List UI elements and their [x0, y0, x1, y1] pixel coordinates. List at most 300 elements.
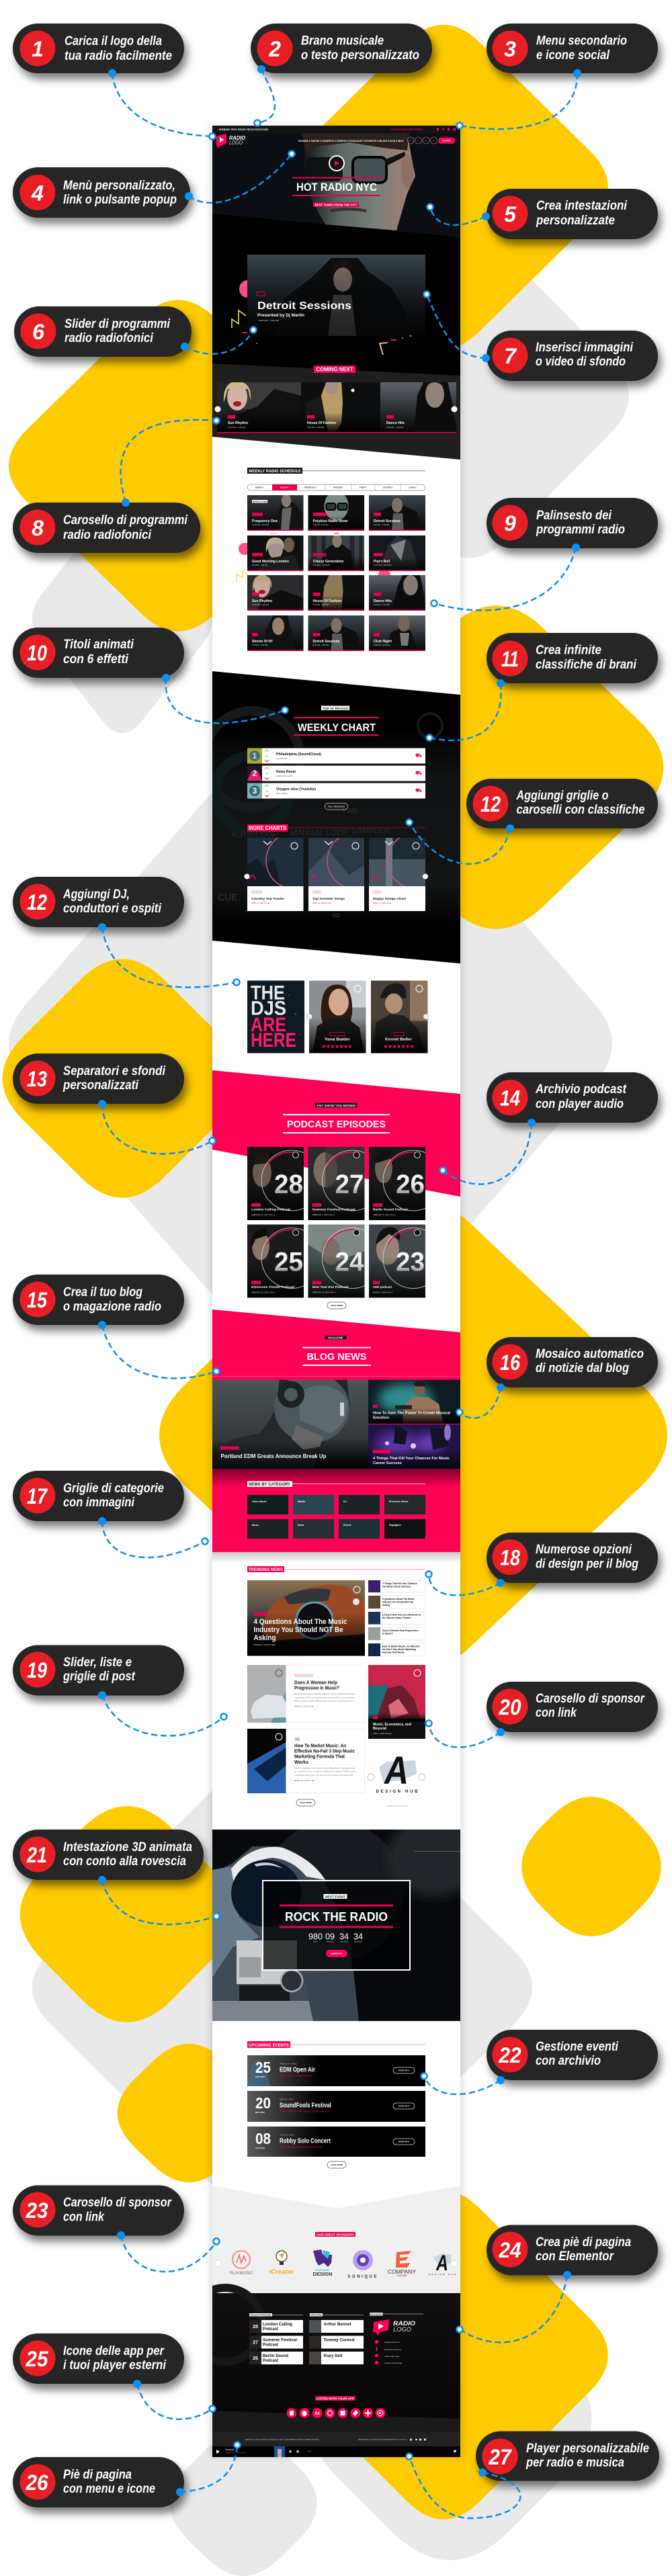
- callout 3: Menu secondario: [536, 34, 627, 48]
- footer column: podcast episodes: Podcast: [263, 2359, 278, 2363]
- callout 7: [487, 331, 658, 381]
- footer column: podcast episodes: [249, 2313, 303, 2364]
- section: podcast episodes: [212, 1070, 460, 1309]
- callout 26: Piè di pagina: [63, 2468, 132, 2482]
- website page mockup: [208, 124, 465, 2459]
- connector 7: [423, 292, 490, 362]
- callout 13: [13, 1054, 184, 1104]
- callout 27: Player personalizzabile: [526, 2442, 649, 2456]
- post card: Does A Woman Help: MARCH 21, 2020 ♥ 6 ◀: [294, 1705, 313, 1708]
- callout 8: 8: [32, 516, 44, 540]
- card: The DJs are here: ARE: [251, 1014, 286, 1036]
- chart row 2: Noise Room: [276, 770, 296, 774]
- podcast heading: [283, 1103, 390, 1133]
- footer column: contacts: [370, 2313, 423, 2364]
- podcast card 27: 27: [335, 1170, 364, 1199]
- card: Club Night: 9:30 PM - 12:00 AM: [374, 644, 390, 646]
- callout 26: con menu e icone: [63, 2482, 155, 2496]
- callout 19: Slider, liste e: [63, 1656, 132, 1670]
- connector 14: [439, 1119, 536, 1185]
- podcast card 28: FEBRUARY 21, 2020 ♥ 66 ▸ 9: [251, 1213, 275, 1216]
- callout 25: Icone delle app per: [63, 2344, 165, 2358]
- chart row 2: 2: [253, 769, 257, 778]
- mosaic post: Musical emotion: [368, 1380, 460, 1424]
- card: Detroit Sessions: Detroit Sessions: [374, 519, 401, 523]
- load more button: LOAD MORE: [331, 1304, 343, 1307]
- footer column: podcast episodes: 26: [253, 2356, 258, 2361]
- chart card: Country Top Tracks: [247, 838, 304, 911]
- card: Frequency One: NOW PLAYING: [253, 500, 267, 503]
- connector 3: [457, 69, 581, 129]
- callout 4: link o pulsante popup: [63, 193, 177, 207]
- event: EDM Open Air: MAR 2021: [255, 2075, 265, 2078]
- callout 2: [251, 24, 432, 73]
- footer column: podcast episodes: 28: [253, 2325, 258, 2329]
- event box: ROCK THE RADIO: [285, 1910, 388, 1924]
- podcast card 26: Berlin Sound Podcast: [373, 1208, 408, 1212]
- chart row 1: ⛟: [415, 753, 422, 759]
- podcast card 27: [308, 1147, 364, 1220]
- podcast card 26: 26: [396, 1170, 425, 1199]
- connector 12 charts: [406, 820, 514, 864]
- card: House Of Fashion: House Of Fashion: [313, 599, 341, 603]
- post list: Industry You Should NOT Be: [382, 1600, 413, 1603]
- callout 13: personalizzati: [62, 1078, 139, 1092]
- category grid: Events: [343, 1524, 351, 1527]
- event box: 980: [308, 1931, 323, 1942]
- logo: Company: [388, 2251, 417, 2277]
- event box: MINUTES: [340, 1941, 348, 1943]
- card: Classy Generation: Classy Generation: [313, 560, 344, 564]
- card: House Of Fashion: House Of Fashion: [307, 421, 336, 425]
- chart card: Country Top Tracks: APRIL 14, 2020 ♥ 11 ◀: [251, 902, 270, 904]
- callout 23: [13, 2185, 184, 2236]
- post list: Asking: [382, 1604, 390, 1606]
- section: blog news: [212, 1310, 460, 1552]
- sponsors badge: OUR GREAT SPONSORS: [317, 2233, 355, 2237]
- callout 12 DJs: [13, 877, 184, 927]
- logo: Design Hub: [429, 2251, 456, 2276]
- hero title: BEST TUNES FROM THE CITY: [314, 203, 358, 207]
- footer column: contacts: My Radio Facebook: [384, 2348, 401, 2351]
- load more button: [327, 1302, 346, 1309]
- music player bar: 0:00: [307, 2450, 311, 2452]
- connector 22: [421, 2073, 505, 2094]
- faint turntable background: [204, 711, 460, 924]
- callout 12 charts: caroselli con classifiche: [516, 803, 645, 817]
- navigation menu: PLAYER: [442, 140, 452, 142]
- callout 18: 18: [500, 1545, 520, 1570]
- full tracklist button: [325, 804, 348, 810]
- callout 7: o video di sfondo: [536, 355, 626, 369]
- callout 24: 24: [499, 2238, 521, 2262]
- event: SoundFools Festival: [247, 2091, 425, 2122]
- card: Detroit Sessions: [369, 495, 425, 531]
- callout 16: 16: [500, 1350, 520, 1375]
- podcast card 28: [247, 1147, 304, 1220]
- event: SoundFools Festival: MAY 2021: [255, 2111, 265, 2114]
- podcast card 25: Electronic Trends Podcast: [251, 1285, 294, 1289]
- callout 19: [13, 1645, 184, 1696]
- full tracklist button: FULL TRACKLIST: [328, 806, 345, 808]
- event: EDM Open Air: 25: [255, 2059, 271, 2076]
- callout 11: classifiche di brani: [536, 658, 637, 672]
- event: Robby Solo Concert: MORE INFO: [398, 2141, 410, 2143]
- logo: PlayMusic: [230, 2251, 253, 2276]
- event: SoundFools Festival: 20: [255, 2094, 271, 2112]
- event: SoundFools Festival: SoundFools Festival: [280, 2102, 331, 2110]
- callout 20: Carosello di sponsor: [536, 1692, 645, 1706]
- callout 13: 13: [27, 1067, 47, 1091]
- footer column: podcast episodes: Summer Festival: [263, 2338, 297, 2342]
- event box: DAYS: [313, 1941, 318, 1943]
- listen with your app badge: LISTEN WITH YOUR APP: [317, 2397, 355, 2401]
- category grid: Video Works: [252, 1500, 267, 1503]
- chart card: Happy Songs Chart: Happy Songs Chart: [373, 897, 406, 901]
- category grid: Electronic Music: [389, 1500, 409, 1503]
- category grid: DJ: [343, 1500, 347, 1503]
- callout 3: 3: [504, 37, 516, 61]
- events heading: [247, 2041, 425, 2048]
- post card: Does A Woman Help: reminded of the continuing lack of diversity on our lineups.: [294, 1696, 355, 1699]
- featured post: car: MARCH 21, 2020 ♥ 6 ◀ 5: [254, 1643, 276, 1646]
- callout 21: con conto alla rovescia: [63, 1854, 186, 1869]
- sponsors badge: [315, 2232, 355, 2237]
- connector 18: [426, 1571, 505, 1595]
- callout 27: [476, 2431, 659, 2481]
- connector 16: [457, 1383, 505, 1418]
- play button: [329, 156, 344, 171]
- callout 2: Brano musicale: [301, 34, 384, 48]
- chart heading: TOP 10 TRACKS: [323, 707, 349, 711]
- post card: How To Market Music: How To Market Music: An: [294, 1744, 346, 1748]
- featured post: car: Asking: [254, 1634, 276, 1642]
- post card: Does A Woman Help: As festival season rapidly sets in, we're constantly being: [294, 1692, 355, 1695]
- post card: How To Market Music: Effective No-Fail 3 Step Music: [294, 1750, 355, 1754]
- event: Robby Solo Concert: 08: [255, 2130, 271, 2147]
- podcast card 23: ADE podcast: [373, 1285, 392, 1289]
- post list: How To Market Music: An Effective: [382, 1645, 420, 1647]
- event: EDM Open Air: DIPLO, TIESTO, TOMCAT, DJ AVA: [280, 2075, 312, 2077]
- post card: How To Market Music: [247, 1729, 365, 1793]
- mosaic post: Career success: Career Success: [373, 1461, 402, 1465]
- connector 1: [108, 69, 215, 140]
- trending heading: [247, 1566, 425, 1572]
- slider decorations: [232, 280, 411, 355]
- callout 20: [487, 1682, 658, 1732]
- chart row 3: 3: [253, 786, 257, 796]
- mosaic post: Portland EDM: [212, 1380, 368, 1469]
- callout 27: 27: [489, 2445, 513, 2469]
- chart row 2: [247, 766, 425, 781]
- section: sponsors: [212, 2186, 460, 2293]
- card: Frequency One: Frequency One: [252, 519, 278, 523]
- more charts heading: [247, 824, 425, 832]
- connector arrows: [98, 65, 581, 2518]
- callout 15: o magazione radio: [63, 1299, 161, 1314]
- top bar: CONTACTS TEAM SUMMER PRIVACY: [391, 128, 423, 131]
- faint turntable background: SAMPLER: [351, 826, 390, 835]
- card: Polybius Radio Show: 3:00 AM - 6:00 AM: [313, 523, 329, 526]
- section: upcoming events: [247, 2041, 425, 2168]
- post card: Does A Woman Help: With a recent study indicating 84 per cent of the lineups of...: [294, 1700, 355, 1703]
- connector 15: [98, 1321, 219, 1378]
- callout 7: 7: [504, 344, 517, 368]
- section: DJs: [247, 981, 429, 1054]
- footer column: speakers: Arthur Bennet: [324, 2323, 351, 2327]
- callout 13: Separatori e sfondi: [63, 1064, 166, 1078]
- chart row 3: Oxygen view (Youtube): [276, 787, 316, 791]
- callout 8: radio radiofonici: [63, 528, 152, 542]
- card: Polybius Radio Show: [308, 495, 364, 531]
- category grid: Music: [252, 1524, 259, 1527]
- chart row 1: 1: [253, 751, 257, 761]
- callout 5: personalizzate: [536, 214, 615, 228]
- logo: RADIO: [229, 135, 246, 141]
- card: Frequency One: 12:00 AM - 2:00 AM: [252, 523, 269, 526]
- event box: 34: [339, 1931, 349, 1942]
- callout 21: 21: [26, 1843, 47, 1867]
- callout 3: e icone social: [536, 48, 610, 62]
- day tabs: [247, 484, 425, 490]
- connector 19: [98, 1691, 227, 1735]
- connector 6: [181, 327, 257, 354]
- card: Club Night: [369, 615, 425, 651]
- callout 7: Inserisci immagini: [536, 341, 634, 355]
- footer column: podcast episodes: London Calling: [263, 2323, 292, 2327]
- callout 17: [13, 1471, 184, 1521]
- card: Detroit Sessions: 6:00 AM - 9:30 AM: [374, 523, 390, 526]
- day tabs: SATURDAY: [382, 486, 393, 489]
- callout 17: 17: [27, 1484, 48, 1508]
- callout 18: [487, 1533, 658, 1583]
- callout 10: 10: [27, 641, 47, 665]
- post card: How To Market Music: Works: [294, 1760, 308, 1765]
- section: coming next carousel: [212, 363, 460, 460]
- load more button: [327, 2161, 346, 2168]
- chart card: Country Top Tracks: Country Top Tracks: [251, 897, 284, 901]
- callout 27: per radio e musica: [526, 2456, 624, 2470]
- connector 10: [162, 674, 288, 723]
- callout 8: [13, 503, 200, 553]
- schedule heading: WEEKLY RADIO SCHEDULE: [249, 469, 302, 474]
- podcast card 24: FEBRUARY 18, 2020 ♥ 66 ▸ 9: [312, 1291, 336, 1294]
- callout 12 charts: [466, 779, 658, 828]
- card: Dance Hits: 6:00 PM - 7:00 PM: [374, 603, 390, 606]
- slider text: Detroit Sessions: [257, 300, 351, 312]
- post list: For Music Career Success: [382, 1586, 411, 1588]
- post card: Does A Woman Help: Progression In Music?: [294, 1686, 339, 1690]
- post card: Music, Economics: [368, 1665, 425, 1739]
- footer column: podcast episodes: Berlin Sound: [263, 2354, 288, 2358]
- card: Pop'n Roll: 10:00 AM - 12:45 PM: [374, 564, 392, 566]
- post card: Does A Woman Help: Does A Woman Help: [294, 1681, 337, 1685]
- callout 15: 15: [27, 1288, 48, 1312]
- event box: NEXT EVENT: [325, 1895, 345, 1899]
- news by category heading: NEWS BY CATEGORY: [249, 1482, 291, 1487]
- card: Sun Rhythm: 12:45 PM - 2:00 PM: [252, 603, 269, 606]
- hero title: HOT RADIO NYC: [296, 181, 377, 194]
- post card: How To Market Music: important thing you can do for your music business and...: [294, 1774, 355, 1776]
- card: Yana Balder: [309, 981, 366, 1054]
- podcast heading: PODCAST EPISODES: [287, 1119, 386, 1130]
- post list: Does A Woman Help Progression: [382, 1629, 419, 1632]
- coming next badge: COMING NEXT: [316, 367, 353, 372]
- listen with your app badge: [315, 2396, 355, 2401]
- callout 12 DJs: Aggiungi DJ,: [62, 888, 130, 902]
- sponsor carousel: Design Hub: DESIGN HUB: [376, 1790, 418, 1794]
- post list: [368, 1580, 425, 1656]
- sponsor carousel: Design Hub: A: [383, 1749, 409, 1793]
- logo: iCreator: [269, 2251, 294, 2275]
- mosaic post: Portland EDM: Portland EDM Greats Announce Break Up: [220, 1453, 327, 1459]
- footer column: podcast episodes: PODCAST EPISODES: [250, 2314, 271, 2317]
- callout 22: [487, 2030, 658, 2080]
- callout 9: programmi radio: [536, 523, 625, 537]
- callout 9: [487, 498, 658, 548]
- decorations behind grid: [237, 533, 390, 582]
- trending heading: TRENDING NEWS: [249, 1568, 284, 1572]
- astronaut: [212, 1846, 359, 2021]
- callout 4: 4: [31, 181, 44, 206]
- connector 20: [426, 1720, 505, 1748]
- logo: iCreator: iCreator: [269, 2268, 294, 2275]
- section: trending news: [212, 1552, 460, 1807]
- card: Club Night: Club Night: [374, 640, 392, 644]
- post card: How To Market Music: How To Market Your Music More Effectively Knowing how: [294, 1767, 355, 1770]
- callout 25: [13, 2333, 184, 2384]
- events heading: UPCOMING EVENTS: [249, 2043, 290, 2048]
- podcast card 26: FEBRUARY 5, 2020 ♥ 66 ▸ 9: [373, 1213, 396, 1216]
- footer column: speakers: Tommy Curesd: [324, 2338, 355, 2342]
- callout 14: Archivio podcast: [535, 1082, 627, 1097]
- footer column: contacts: RADIO: [393, 2320, 415, 2327]
- card: Kermit Beller: Kermit Beller: [385, 1037, 413, 1041]
- callout 12 DJs: 12: [27, 890, 47, 914]
- callout 6: 6: [32, 320, 44, 344]
- callout 14: con player audio: [536, 1097, 624, 1111]
- connector 11: [426, 679, 505, 740]
- card: Pop'n Roll: [369, 535, 425, 571]
- post card: How To Market Music: Marketing Formula That: [294, 1755, 345, 1760]
- schedule heading: [247, 468, 425, 474]
- mosaic post: Musical emotion: How To Gain The Power To Create Musical: [373, 1411, 451, 1415]
- callout 3: [487, 24, 658, 73]
- callout 22: Gestione eventi: [536, 2040, 619, 2054]
- card: Sun Rhythm: [247, 575, 304, 611]
- callout 12 charts: Aggiungi griglie o: [516, 789, 609, 803]
- logo: LOGO: [229, 140, 243, 146]
- post card: How To Market Music: MARCH 20, 2020 ♥ 7 ◀ 2: [294, 1779, 314, 1782]
- footer column: podcast episodes: 27: [253, 2341, 258, 2345]
- post list: In Music?: [382, 1633, 393, 1635]
- chart row 2: SEBASTIAN SAMS: [276, 775, 293, 777]
- mosaic post: Musical emotion: Emotion: [373, 1416, 389, 1420]
- card: Dance Hits: 6:00 PM - 7:00 PM: [386, 426, 404, 429]
- post card: Music, Economics: Beyond: [373, 1727, 386, 1731]
- music player bar: DaBaby Feat. Roddy Ricch: [226, 2452, 247, 2454]
- callout 21: Intestazione 3D animata: [63, 1840, 192, 1854]
- callout 21: [13, 1830, 204, 1880]
- chart card: Top Summer Songs: Top Summer Songs: [312, 897, 345, 901]
- post list: 4 Questions About The Music: [382, 1598, 415, 1600]
- connector 21: [98, 1876, 219, 1924]
- chart row 3: NICK JAMES: [276, 792, 288, 795]
- card: Good Morning London: 8:30 AM - 9:00 AM: [252, 564, 268, 566]
- podcast card 27: FEBRUARY 1, 2020 ♥ 66 ▸ 9: [312, 1213, 335, 1216]
- section: footer: [188, 2288, 460, 2457]
- connector 9: [431, 544, 580, 610]
- chart carousel arrows and dots: [245, 873, 428, 916]
- event: Robby Solo Concert: CHICAGO • ROCK: [280, 2134, 294, 2137]
- DJ carousel arrows: [306, 1014, 429, 1019]
- chart heading: [294, 705, 379, 736]
- category grid: Highlights: [389, 1524, 401, 1527]
- callout 18: Numerose opzioni: [536, 1543, 632, 1557]
- event box: MORE INFO: [331, 1952, 343, 1955]
- callout 11: 11: [501, 647, 519, 671]
- chart card: Happy Songs Chart: APRIL 14, 2020 ♥ 11 ◀: [373, 902, 392, 904]
- callout 8: Carosello di programmi: [63, 513, 188, 527]
- post card: How To Market Music: to market your music is without a doubt THE most: [294, 1770, 355, 1772]
- callout 15: [13, 1275, 184, 1325]
- load more button: LOAD MORE: [331, 2163, 343, 2166]
- callout 5: 5: [504, 202, 517, 226]
- app icons: [286, 2408, 386, 2418]
- day tabs: FRIDAY: [360, 486, 366, 489]
- hero title: [292, 177, 380, 207]
- card: Sun Rhythm: 12:45 PM - 2:00 PM: [228, 426, 246, 429]
- gradient band: [212, 1469, 460, 1488]
- category grid: Mobile: [298, 1500, 305, 1503]
- event: Robby Solo Concert: CHRIS BROWN, PAR PLY, BLACK ASTEROID: [280, 2146, 323, 2149]
- card: House Of Fashion: [308, 575, 364, 611]
- card: Detroit Sessions: 8:00 PM - 9:30 PM: [313, 644, 329, 646]
- section: weekly chart: [204, 671, 460, 963]
- podcast card 28: 28: [274, 1170, 303, 1199]
- logo: Sonique: SONIQUE: [348, 2275, 376, 2279]
- card: Dance Hits: Dance Hits: [374, 599, 392, 603]
- callout 5: [487, 189, 658, 239]
- footer column: speakers: Klary Dell: [324, 2354, 343, 2358]
- mosaic post: Career success: [368, 1424, 460, 1469]
- footer column: speakers: [309, 2313, 364, 2364]
- card: House Of Fashion: 2:00 PM - 5:00 PM: [307, 426, 325, 429]
- event box: HOURS: [327, 1941, 333, 1943]
- section: hero header: [212, 126, 460, 435]
- mosaic post: Career success: 4 Things That Kill Your Chances For Music: [373, 1457, 450, 1461]
- post card: Does A Woman Help: [247, 1665, 365, 1723]
- load more button: [296, 1799, 315, 1806]
- event box: SECONDS: [354, 1941, 363, 1943]
- logo: [216, 134, 246, 148]
- slider photo: [247, 255, 425, 336]
- footer column: podcast episodes: Podcast: [263, 2327, 278, 2331]
- blog heading: MAGAZINE: [328, 1336, 343, 1340]
- podcast card 27: Summer Festival Podcast: [312, 1208, 355, 1212]
- section: weekly radio schedule: [237, 468, 425, 651]
- post list: No-Fail 3 Step Music Marketing: [382, 1648, 416, 1651]
- day tabs: MONDAY: [255, 486, 263, 489]
- connector 17: [98, 1517, 208, 1557]
- app icons: #z: [314, 2411, 320, 2416]
- post list: the Opera's Grand Theatre: [382, 1617, 411, 1619]
- logo: Elephant Design: DESIGN: [313, 2272, 332, 2277]
- hero face photo: [302, 133, 415, 230]
- callout 26: 26: [26, 2471, 48, 2495]
- callout 22: con archivio: [536, 2054, 601, 2068]
- navigation menu: SONGS ▾ SHOW ▾ CHARTS ▾ VIDEOS ▾ PODCAST ▾ EVENTS ▾ BLOG ▾ DJS ▾ BUY: [298, 140, 405, 142]
